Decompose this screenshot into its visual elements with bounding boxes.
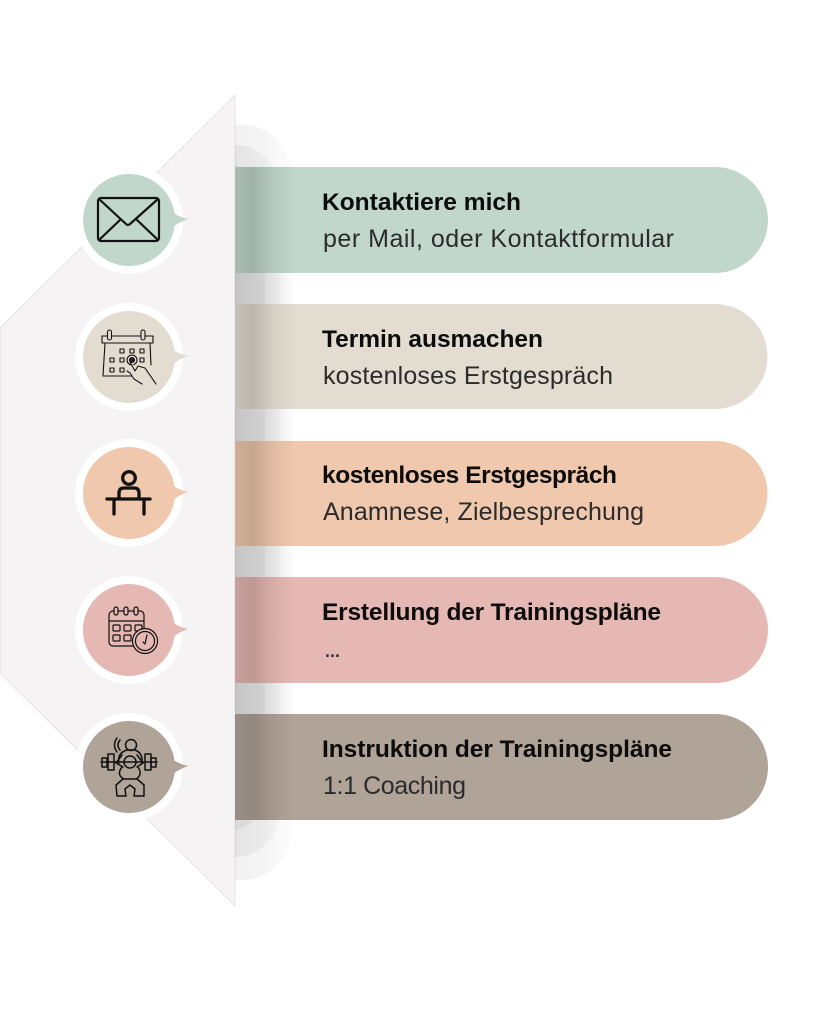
white ring <box>75 439 183 547</box>
coloured disc <box>83 721 175 813</box>
text: step 3: kostenloses Erstgespräch <box>322 462 617 489</box>
text: step 1: per Mail, oder Kontaktformular <box>323 225 674 253</box>
icon: person at desk <box>107 472 150 514</box>
speech tail <box>172 349 188 365</box>
speech tail <box>172 759 188 775</box>
drop shadow column behind bars <box>235 125 288 880</box>
step 3 marker <box>75 439 188 547</box>
text: step 4: Erstellung der Trainingspläne <box>322 599 661 626</box>
step 1 marker <box>75 166 188 274</box>
bar: step 5 <box>235 714 768 820</box>
coloured disc <box>83 584 175 676</box>
speech tail <box>172 485 188 501</box>
text: step 1: Kontaktiere mich <box>322 189 521 216</box>
white ring <box>75 166 183 274</box>
text: step 2: kostenloses Erstgespräch <box>323 362 613 390</box>
bar left-edge shading <box>235 167 295 820</box>
icon: envelope <box>98 198 159 241</box>
bar: step 1 <box>235 167 768 273</box>
white ring <box>75 713 183 821</box>
background triangle panel <box>0 95 235 906</box>
bar: step 2 <box>235 304 768 409</box>
icon: calendar with clock <box>109 607 158 654</box>
icon: weightlifter with coach <box>101 738 157 796</box>
coloured disc <box>83 447 175 539</box>
bars panel <box>235 167 768 820</box>
step 2 marker <box>75 303 188 411</box>
speech tail <box>172 622 188 638</box>
bar: step 4 <box>235 577 768 683</box>
text: step 5: 1:1 Coaching <box>323 772 466 800</box>
text: step 3: Anamnese, Zielbesprechung <box>323 498 644 526</box>
text: step 4 <box>322 599 661 663</box>
step 5 marker <box>75 713 188 821</box>
speech tail <box>172 212 188 228</box>
white ring <box>75 576 183 684</box>
text: step 2 <box>322 326 613 390</box>
text: step 3 <box>322 462 644 526</box>
white ring <box>75 303 183 411</box>
text: step 1 <box>322 189 674 253</box>
bar: step 3 <box>235 441 768 546</box>
text: step 4: ... <box>324 635 341 663</box>
coloured disc <box>83 174 175 266</box>
text: step 5 <box>322 736 672 800</box>
text: step 2: Termin ausmachen <box>322 326 543 353</box>
coloured disc <box>83 311 175 403</box>
icon: calendar with finger <box>102 330 156 384</box>
step 4 marker <box>75 576 188 684</box>
text: step 5: Instruktion der Trainingspläne <box>322 736 672 763</box>
